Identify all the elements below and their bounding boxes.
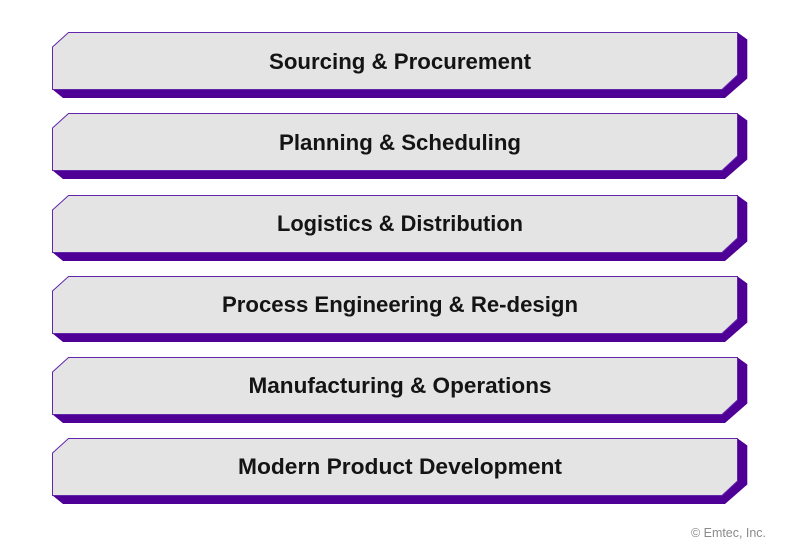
bar: Manufacturing & Operations bbox=[52, 357, 747, 423]
bar: Logistics & Distribution bbox=[52, 195, 747, 261]
bar: Planning & Scheduling bbox=[52, 113, 747, 179]
bar: Sourcing & Procurement bbox=[52, 32, 747, 98]
bar: Modern Product Development: Modern Product Development bbox=[238, 454, 563, 479]
bar: Logistics & Distribution: Logistics & Distribution bbox=[277, 211, 523, 236]
bar: Planning & Scheduling: Planning & Scheduling bbox=[279, 130, 521, 155]
bar: Process Engineering & Re-design bbox=[52, 276, 747, 342]
bar: Process Engineering & Re-design: Process Engineering & Re-design bbox=[222, 292, 578, 317]
copyright note: © Emtec, Inc. bbox=[691, 526, 766, 540]
bar: Manufacturing & Operations: Manufacturing & Operations bbox=[248, 373, 552, 398]
bar: Modern Product Development bbox=[52, 438, 747, 504]
bar: Sourcing & Procurement: Sourcing & Procurement bbox=[269, 49, 532, 74]
